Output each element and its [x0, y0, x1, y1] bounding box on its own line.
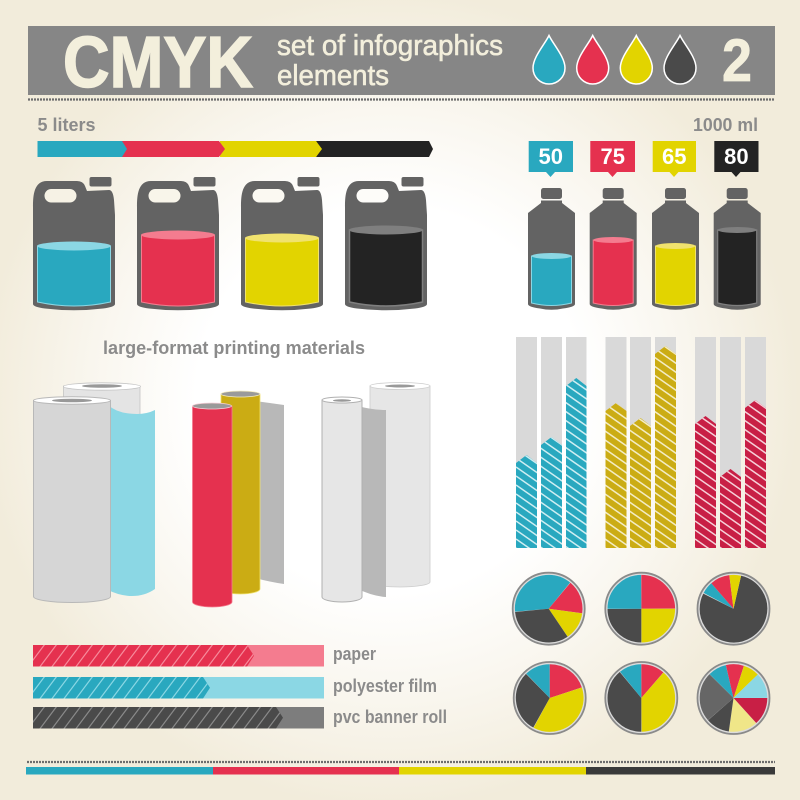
- title: CMYK: CMYK: [63, 23, 253, 103]
- tag: 75: [590, 141, 635, 177]
- label: paper: paper: [333, 644, 376, 664]
- progress bar: paper: [33, 645, 376, 666]
- tag: 75: 75: [600, 144, 625, 169]
- heading: large-format printing materials: large-format printing materials: [103, 338, 365, 358]
- subtitle: elements: [277, 60, 389, 92]
- header banner: [28, 23, 775, 103]
- bar chart: cyan: [516, 337, 586, 548]
- pie chart 3: [698, 573, 770, 645]
- jug: yellow 5 liters: [241, 177, 323, 310]
- label: 1000 ml: 1000 ml: [693, 115, 758, 135]
- jug: magenta 5 liters: [137, 177, 219, 310]
- tag: 50: [529, 141, 573, 177]
- pie chart 4: [514, 662, 586, 734]
- footer colour strip: [26, 767, 775, 774]
- progress bar: polyester film: [33, 677, 436, 698]
- rolls: white with grey sheet: [322, 382, 430, 602]
- tag: 80: [714, 141, 758, 177]
- tag: 50: 50: [539, 144, 563, 169]
- label: 5 liters: 5 liters: [38, 115, 96, 135]
- tag: 65: [653, 141, 696, 177]
- label: polyester film: polyester film: [333, 676, 437, 696]
- pie chart 6: [698, 662, 770, 734]
- jug: cyan 5 liters: [33, 177, 115, 310]
- bar chart: crimson: [695, 337, 766, 548]
- pie chart 2: [605, 573, 677, 645]
- bottle: yellow 65: [652, 188, 699, 310]
- bottle: magenta 75: [590, 188, 637, 310]
- bottle: cyan 50: [528, 188, 575, 310]
- pie chart 1: [513, 573, 585, 645]
- label: pvc banner roll: pvc banner roll: [333, 707, 447, 727]
- bar chart: gold: [606, 337, 676, 548]
- progress bar: pvc banner roll: [33, 707, 446, 728]
- rolls: gold and red with grey sheet: [192, 391, 284, 607]
- jug: black 5 liters: [345, 177, 427, 310]
- subtitle: set of infographics: [277, 30, 503, 62]
- bottle: black 80: [714, 188, 761, 310]
- pie chart 5: [605, 662, 677, 734]
- rolls: grey with blue film: [34, 383, 155, 602]
- icon: ink drops: [533, 36, 696, 84]
- tag: 65: 65: [662, 144, 687, 169]
- number 2: 2: [722, 27, 752, 94]
- CMYK arrow bar: [38, 141, 433, 157]
- tag: 80: 80: [724, 144, 749, 169]
